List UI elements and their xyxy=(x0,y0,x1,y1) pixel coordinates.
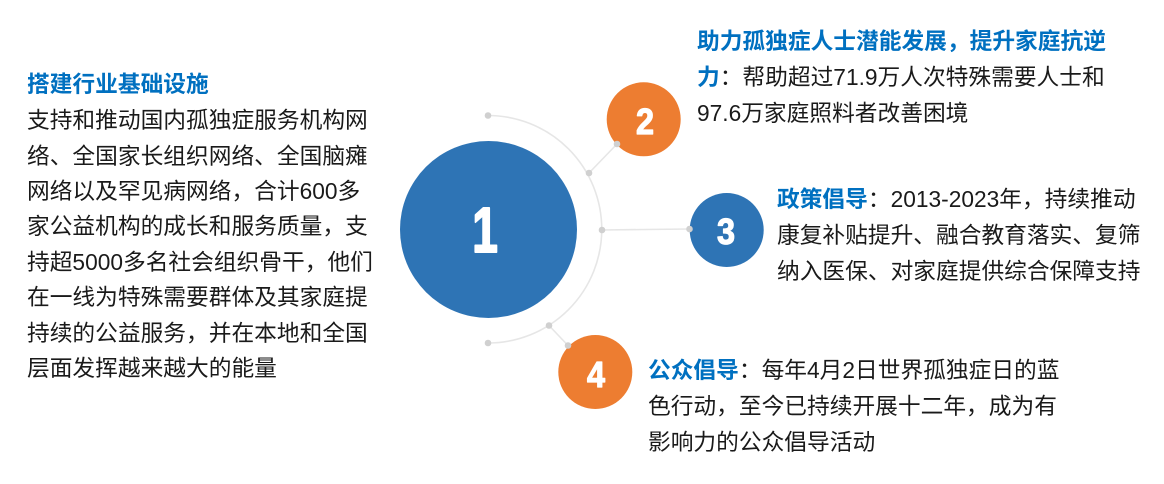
text block: 搭建行业基础设施 xyxy=(27,71,373,381)
text block: 公众倡导: 色行动，至今已持续开展十二年，成为有 xyxy=(648,393,1057,419)
text block: 搭建行业基础设施: 络、全国家长组织网络、全国脑瘫 xyxy=(27,143,368,169)
circle 1: 1 xyxy=(472,195,498,266)
text block: 政策倡导: 政策倡导：2013-2023年，持续推动 xyxy=(777,186,1136,212)
text block: 公众倡导: 公众倡导：每年4月2日世界孤独症日的蓝 xyxy=(648,357,1060,383)
circle 4 xyxy=(558,335,632,409)
text block: 潜能发展: 97.6万家庭照料者改善困境 xyxy=(697,100,968,126)
text block: 潜能发展 xyxy=(697,28,1106,126)
text block: 公众倡导: 影响力的公众倡导活动 xyxy=(648,429,875,455)
text block: 搭建行业基础设施: 层面发挥越来越大的能量 xyxy=(27,355,277,381)
text block: 搭建行业基础设施: 支持和推动国内孤独症服务机构网 xyxy=(27,107,368,133)
text block: 搭建行业基础设施: 持续的公益服务，并在本地和全国 xyxy=(27,320,368,346)
text block: 搭建行业基础设施: 持超5000多名社会组织骨干，他们 xyxy=(27,249,373,275)
connector arc xyxy=(488,116,689,346)
circle 4: 4 xyxy=(587,355,605,395)
text block: 政策倡导 xyxy=(777,186,1140,284)
text block: 政策倡导: 康复补贴提升、融合教育落实、复筛 xyxy=(777,222,1140,248)
text block: 搭建行业基础设施: 家公益机构的成长和服务质量，支 xyxy=(27,213,368,239)
circle 3: 3 xyxy=(717,212,735,252)
connector dots xyxy=(485,112,693,349)
circle 2: 2 xyxy=(636,102,654,142)
text block: 搭建行业基础设施: 搭建行业基础设施 xyxy=(27,71,209,97)
text block: 公众倡导 xyxy=(648,357,1060,455)
circle 2 xyxy=(607,82,681,156)
text block: 搭建行业基础设施: 在一线为特殊需要群体及其家庭提 xyxy=(27,284,368,310)
text block: 搭建行业基础设施: 网络以及罕见病网络，合计600多 xyxy=(27,178,360,204)
text block: 政策倡导: 纳入医保、对家庭提供综合保障支持 xyxy=(777,258,1140,284)
circle 3 xyxy=(690,193,764,267)
text block: 潜能发展: 力：帮助超过71.9万人次特殊需要人士和 xyxy=(697,64,1105,90)
text block: 潜能发展: 助力孤独症人士潜能发展，提升家庭抗逆 xyxy=(697,28,1106,54)
circle 1 xyxy=(400,141,577,318)
